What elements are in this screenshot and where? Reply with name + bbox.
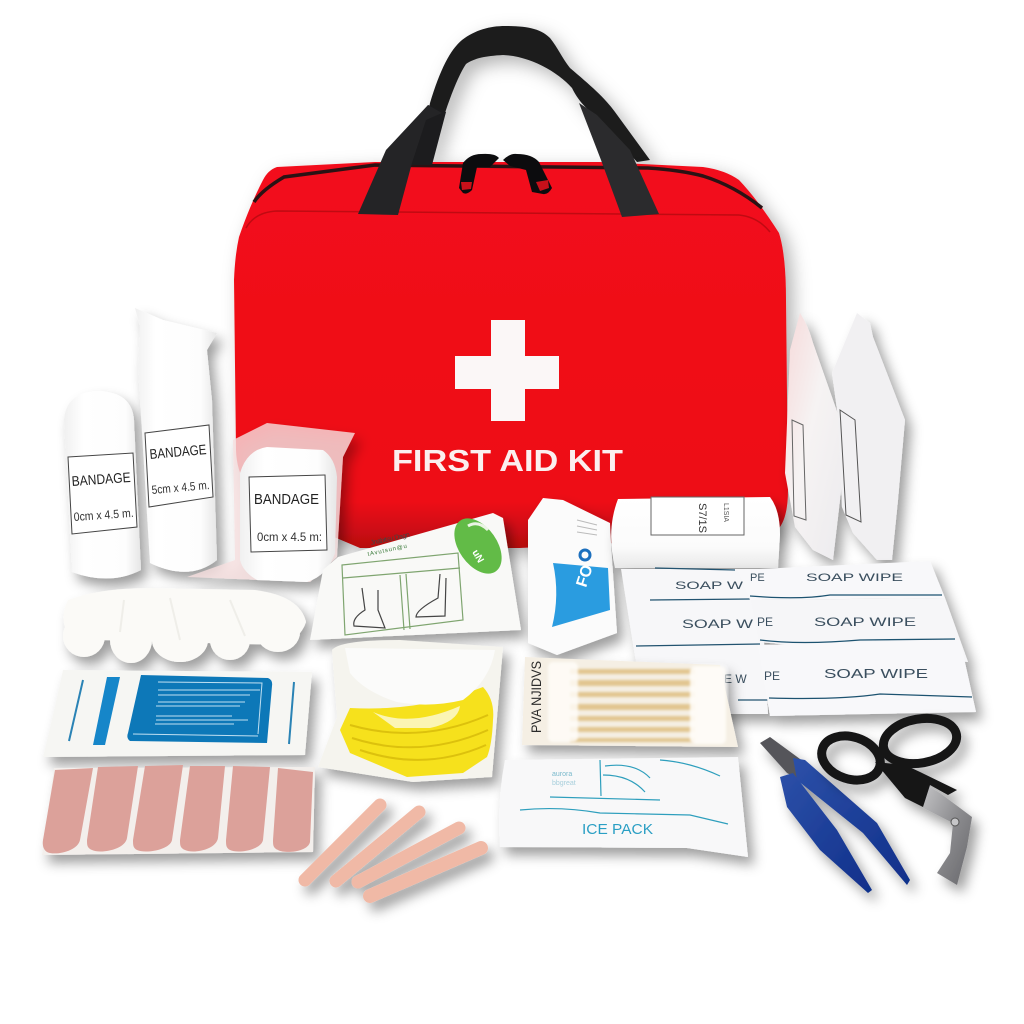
bag body bbox=[234, 162, 788, 548]
cotton tips bbox=[548, 662, 726, 744]
zipper pull right bbox=[503, 154, 552, 194]
label: 5cm x 4.5 m. bbox=[151, 478, 210, 497]
left stack: E W bbox=[724, 672, 747, 686]
handle: front left strap bbox=[358, 105, 442, 215]
handle: strap join bbox=[404, 105, 446, 165]
ice pack: bbgreat bbox=[552, 780, 576, 787]
right stack: top: PE bbox=[750, 572, 765, 584]
packets: right sterile pads bbox=[785, 313, 905, 560]
sticks bbox=[570, 669, 695, 742]
foot cover packet bbox=[310, 510, 521, 640]
label: S7/1S bbox=[696, 503, 708, 533]
gauze packet: blue bbox=[43, 670, 312, 757]
label: 0cm x 4.5 m. bbox=[73, 506, 134, 524]
right stack: middle: PE bbox=[757, 615, 773, 629]
airway tube bag bbox=[318, 640, 503, 782]
label: 0cm x 4.5 m: bbox=[257, 530, 322, 544]
bandage roll: tall bbox=[135, 308, 217, 572]
left stack: SOAP W bbox=[675, 580, 744, 592]
label bbox=[68, 453, 137, 534]
soft pack: blue label: FO bbox=[574, 563, 597, 589]
handle: front right strap bbox=[579, 103, 659, 217]
single plasters bbox=[305, 805, 481, 896]
instruction frame bbox=[342, 553, 463, 635]
label bbox=[145, 425, 213, 507]
left stack bbox=[621, 568, 770, 714]
label bbox=[651, 497, 744, 535]
label: BANDAGE bbox=[149, 441, 207, 462]
plaster two bbox=[336, 812, 419, 881]
white cross bbox=[455, 320, 559, 421]
yellow tube bbox=[340, 687, 493, 777]
strip of plasters bbox=[42, 765, 315, 855]
handle: back strap bbox=[419, 26, 650, 162]
ice pack: ICE PACK bbox=[582, 821, 653, 838]
right stack: bottom: SOAP WIPE bbox=[824, 666, 928, 681]
ice pack bbox=[499, 757, 748, 857]
label: BANDAGE bbox=[254, 491, 319, 508]
plaster four bbox=[370, 848, 481, 896]
bandage roll: lying bbox=[611, 497, 780, 568]
right stack: bottom bbox=[758, 640, 976, 716]
blades bbox=[922, 785, 972, 885]
tweezers bbox=[760, 737, 910, 893]
blue arm left bbox=[780, 773, 872, 893]
label: BANDAGE bbox=[71, 469, 131, 489]
bag label: FIRST AID KIT bbox=[392, 443, 623, 478]
bag: red first aid kit bbox=[234, 103, 788, 548]
black body bbox=[875, 762, 957, 807]
left stack: SOAP W bbox=[682, 617, 754, 631]
cotton swabs: PVA NJIDVS bbox=[528, 661, 544, 733]
packet two bbox=[832, 313, 905, 560]
bandage roll: wrapped bbox=[187, 423, 355, 582]
label bbox=[249, 475, 327, 552]
foot cover packet: tAvutsun@u bbox=[367, 544, 408, 558]
zipper pull left bbox=[459, 154, 499, 194]
bag top panel seam bbox=[246, 211, 770, 232]
packet one bbox=[785, 313, 843, 560]
plaster one bbox=[305, 805, 380, 880]
scissors bbox=[816, 713, 972, 885]
soap wipes bbox=[621, 561, 976, 716]
finger loops bbox=[816, 713, 960, 787]
bandage roll: left bbox=[64, 391, 141, 579]
right stack: top bbox=[738, 561, 945, 600]
blue panel bbox=[552, 563, 610, 627]
foot cover packet: Jnabitsu Dagn bbox=[370, 532, 411, 547]
mask disc bbox=[345, 648, 495, 705]
bag zipper bbox=[254, 165, 762, 208]
cotton swabs bbox=[522, 657, 738, 747]
blue strip bbox=[93, 677, 120, 745]
blue label bbox=[127, 675, 272, 743]
green badge bbox=[445, 510, 511, 582]
plaster three bbox=[358, 828, 459, 882]
right stack: top: SOAP WIPE bbox=[806, 572, 903, 584]
gloves bbox=[63, 588, 306, 663]
blue arm right bbox=[793, 758, 910, 885]
foot cover packet: uN bbox=[469, 548, 486, 565]
label: L1SIA bbox=[722, 503, 729, 522]
right stack: middle: SOAP WIPE bbox=[814, 615, 916, 629]
right stack: bottom: PE bbox=[764, 669, 780, 683]
soft pack: blue label bbox=[528, 498, 617, 655]
right stack: middle bbox=[751, 598, 968, 662]
metal head bbox=[760, 737, 815, 780]
ice pack: aurora bbox=[552, 771, 572, 778]
